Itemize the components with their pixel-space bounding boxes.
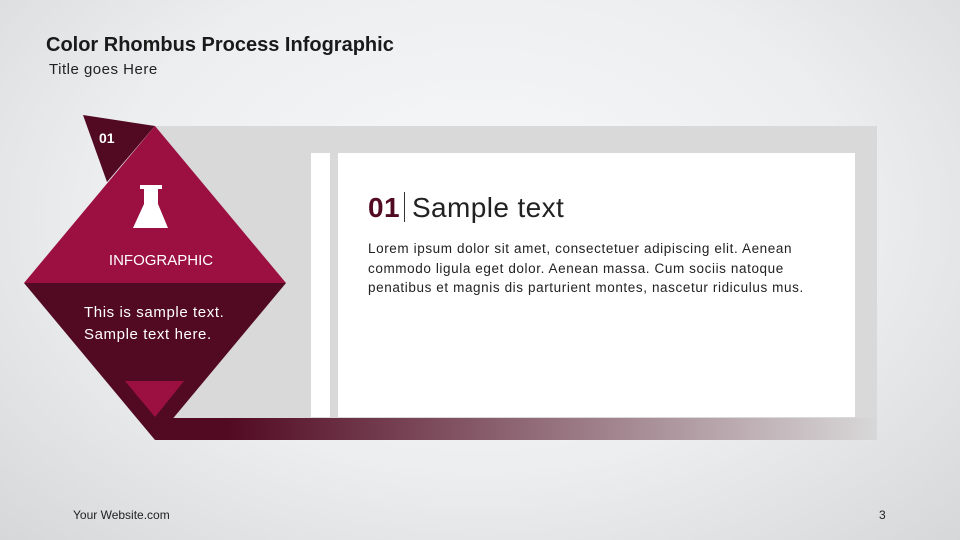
body text: commodo ligula eget dolor. Aenean massa. Cum sociis natoque [368,260,784,276]
tab: 01: 01 [99,130,115,146]
sample text [84,304,224,343]
subtitle: Title goes Here [49,61,158,78]
page number: 3 [879,508,886,522]
heading: 01 Sample text: 01 Sample text [368,192,564,223]
sample text: This is sample text. [84,304,224,321]
rhombus lower half [24,283,286,440]
label: INFOGRAPHIC: INFOGRAPHIC [109,252,213,269]
body text [368,241,804,295]
tab: 01 [83,115,155,182]
body text: penatibus et magnis dis parturient montes, nascetur ridiculus mus. [368,280,804,295]
small triangle [125,381,184,417]
rhombus upper half [24,126,286,283]
panel: content box [338,153,855,417]
gradient bar [155,418,880,440]
panel: gray background [155,126,877,440]
title: Color Rhombus Process Infographic [46,34,394,56]
icon: flask [133,185,168,228]
white strip [311,153,330,417]
body text: Lorem ipsum dolor sit amet, consectetuer adipiscing elit. Aenean [368,241,792,256]
sample text: Sample text here. [84,326,212,343]
footer: website: Your Website.com [73,508,170,522]
